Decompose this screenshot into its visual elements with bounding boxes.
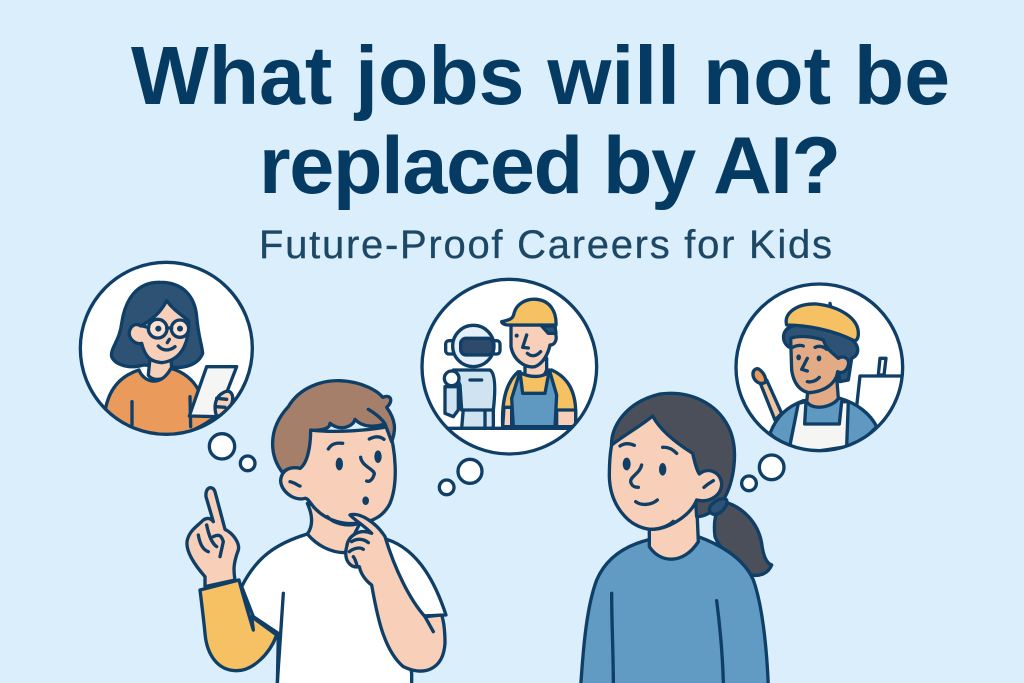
boy arm and thinking hand [346,514,445,671]
thought dots [742,455,784,491]
girl neck [649,503,698,559]
boy yellow sleeve [200,580,277,671]
girl sweater [581,537,768,683]
right group: girl and artist thought bubble [581,284,907,683]
subtitle: Future-Proof Careers for Kids [259,223,832,267]
title: What jobs will not be [131,29,950,122]
boy head [281,427,395,524]
girl character [581,393,772,683]
boy face [336,458,343,470]
title [131,29,950,211]
girl hair [612,393,735,517]
boy character [187,381,446,683]
girl head [609,416,722,529]
boy neck [307,503,363,553]
robot [444,325,500,428]
title: replaced by AI? [259,121,841,211]
centre thought bubble: robot and construction worker [422,279,597,495]
thought bubble: teacher with tablet [80,262,252,437]
boy shirt [242,534,446,683]
boy pointing hand [187,488,239,587]
thought bubble: artist [736,284,907,453]
thought dots [209,434,255,471]
worker [502,299,576,427]
ponytail [714,502,772,575]
thought dots [439,459,482,495]
girl face [623,458,631,470]
left group: boy and teacher thought bubble [80,262,446,683]
hair tie [709,499,727,514]
boy hair [273,381,394,473]
